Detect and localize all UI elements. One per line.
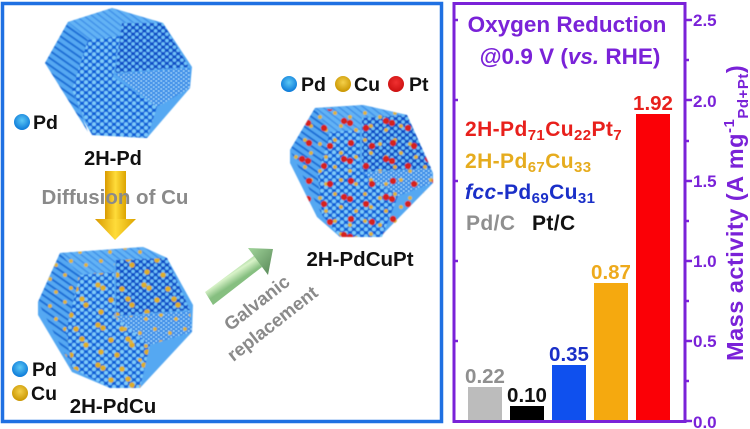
legend: 69	[532, 190, 549, 207]
label: 2H-PdCuPt: 2H-PdCuPt	[306, 248, 414, 271]
panel: synthesis scheme	[2, 4, 442, 422]
arrow: diffusion	[95, 171, 136, 240]
legend: Cu	[549, 181, 578, 204]
label: 2H-PdCu: 2H-PdCu	[70, 395, 156, 418]
axis tick labels: 1.0	[693, 252, 717, 271]
chart title	[468, 12, 666, 69]
axis tick labels: 2.0	[693, 92, 717, 111]
panel: mass activity chart	[454, 4, 750, 429]
legend: fcc-Pd	[465, 181, 532, 204]
particle: 2H-Pd	[45, 8, 192, 138]
bar: Pt/C	[507, 384, 547, 420]
legend: Pd and Cu: Pd	[32, 359, 57, 381]
legend: Pt/C	[532, 212, 576, 235]
legend: Pt	[591, 118, 613, 141]
bar: Pd/C	[465, 365, 505, 420]
axis tick labels: 0.5	[693, 332, 717, 351]
particle: 2H-PdCu	[38, 247, 193, 388]
legend: 2H-Pd	[465, 118, 528, 141]
legend: 71	[528, 127, 545, 144]
legend: Pd	[14, 112, 58, 134]
bar: fcc-Pd69Cu31	[549, 343, 589, 420]
bar: 2H-Pd71Cu22Pt7: 1.92	[633, 92, 673, 115]
legend: 31	[578, 190, 595, 207]
legend: Cu	[545, 118, 574, 141]
bar: 2H-Pd67Cu33	[591, 261, 631, 420]
label: Galvanic replacement: replacement	[223, 282, 322, 365]
axis tick labels	[693, 11, 717, 429]
bar: 2H-Pd71Cu22Pt7	[633, 92, 673, 420]
axis title: -1	[721, 119, 738, 133]
legend: Pd, Cu, Pt: Cu	[354, 74, 380, 96]
legend: 7	[613, 127, 622, 144]
axis title: Mass activity (A mg	[722, 133, 748, 361]
legend: Pd and Cu: Cu	[31, 383, 57, 405]
legend: Pd, Cu, Pt	[281, 74, 429, 96]
legend: 2H-Pd	[465, 150, 528, 173]
chart title: Oxygen Reduction	[468, 12, 666, 37]
bar: Pt/C: 0.10	[507, 384, 547, 407]
legend: Pd, Cu, Pt: Pt	[409, 74, 429, 96]
legend	[465, 118, 622, 235]
chart title: @0.9 V (vs. RHE)	[480, 44, 660, 69]
chart frame	[454, 4, 685, 422]
legend: Cu	[545, 150, 574, 173]
legend: 67	[528, 159, 545, 176]
bar: fcc-Pd69Cu31: 0.35	[549, 343, 589, 366]
bar: Pd/C: 0.22	[465, 365, 505, 388]
particle: 2H-PdCuPt	[290, 105, 433, 237]
axis tick labels: 1.5	[693, 172, 717, 191]
legend: Pd and Cu	[12, 359, 57, 405]
legend: 22	[574, 127, 591, 144]
legend: Pd/C	[466, 212, 515, 235]
arrow: galvanic replacement	[205, 248, 273, 305]
label: 2H-Pd: 2H-Pd	[84, 148, 142, 170]
axis tick labels: 2.5	[693, 11, 717, 30]
legend: Pd, Cu, Pt: Pd	[301, 74, 326, 96]
label: Galvanic replacement: Galvanic	[220, 271, 294, 335]
axis title: )	[722, 65, 748, 73]
legend: 33	[574, 159, 591, 176]
axis ticks	[454, 20, 692, 421]
bar: 2H-Pd67Cu33: 0.87	[591, 261, 631, 284]
label: Diffusion of Cu: Diffusion of Cu	[42, 186, 188, 209]
legend: Pd: Pd	[33, 112, 58, 134]
